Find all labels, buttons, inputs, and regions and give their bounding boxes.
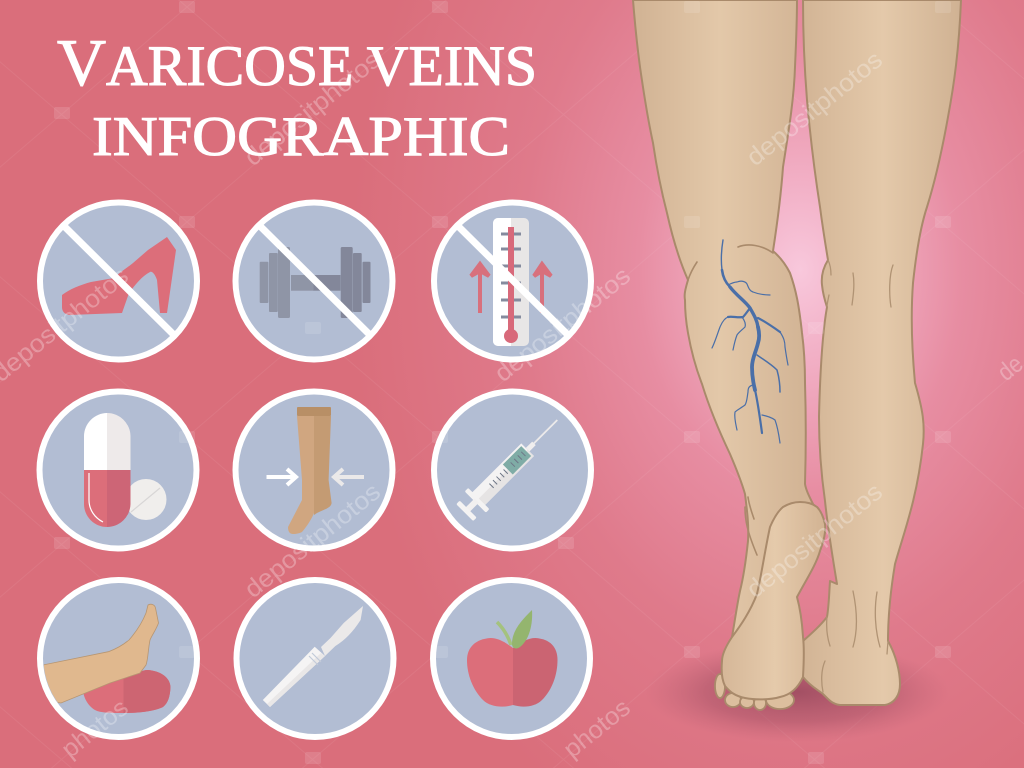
watermarks: depositphotos [741,46,888,172]
watermarks: depositphotos [489,262,636,388]
floor shadow [645,642,949,742]
right leg [803,0,961,705]
icon: no high heels [40,202,197,360]
icon: scalpel [236,580,394,737]
watermarks: photos [56,694,134,764]
watermarks: depositphotos [741,478,888,604]
watermarks: depositphotos [239,46,386,172]
icon: no weights [236,202,392,360]
icon: elevated foot [40,580,197,737]
left foot toes [715,674,794,710]
legs illustration [633,0,961,710]
left foot sole [722,502,825,699]
watermarks: depositphotos [239,478,386,604]
varicose veins [712,240,788,443]
left leg [633,0,813,640]
icon: compression stocking [236,392,392,548]
watermarks: photos [558,694,636,764]
title line 2: INFOGRAPHIC [92,106,510,168]
icon: apple [433,580,590,737]
icon: syringe [434,392,591,548]
title line 1: VARICOSE VEINS [57,26,537,100]
title [57,26,537,168]
icon: no heat [434,202,591,360]
icon: pills [40,392,196,548]
